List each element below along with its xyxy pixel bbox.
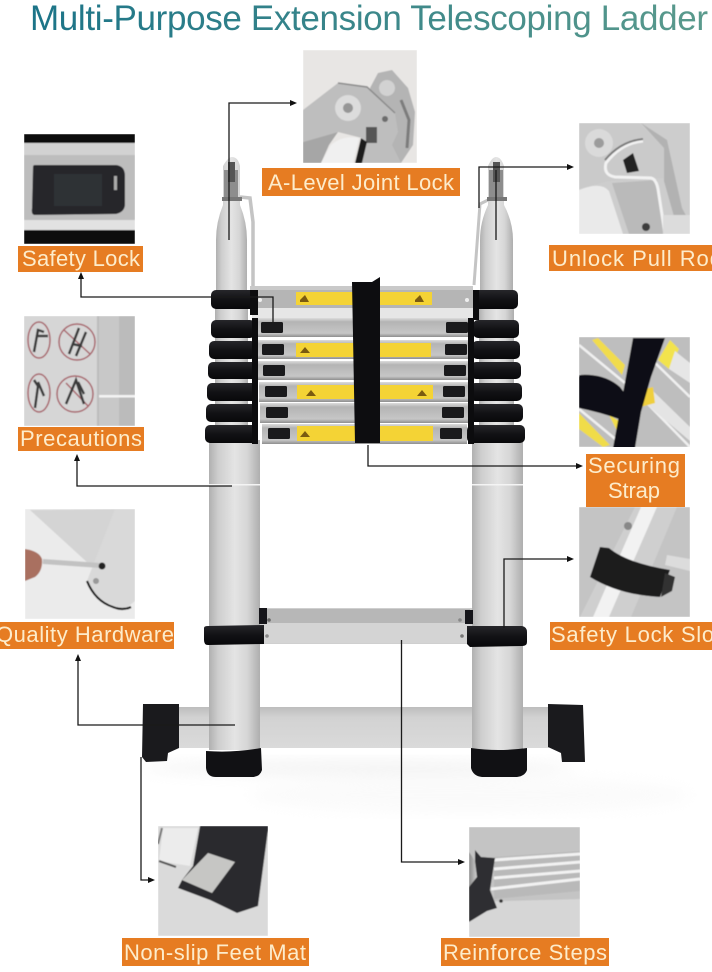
thumbnail: reinforce steps (469, 827, 580, 937)
thumbnail: unlock pull rod (579, 123, 690, 234)
rung 6 (262, 424, 467, 444)
label: Securing Strap: Securing (588, 453, 680, 478)
connector: Non-slip Feet Mat (141, 757, 155, 883)
left upper tube and joint (216, 157, 253, 292)
rung 3 (258, 361, 471, 380)
connector: Unlock Pull Rod (479, 164, 574, 240)
connector: Securing Strap (368, 445, 583, 469)
base bar (179, 707, 549, 748)
label: Securing Strap: Strap (608, 478, 660, 503)
label: Reinforce Steps: Reinforce Steps (443, 940, 607, 965)
connector: Precautions (74, 454, 232, 486)
connector: Reinforce Steps (402, 640, 465, 865)
left foot (142, 704, 179, 762)
thumbnail: quality hardware (25, 509, 135, 619)
securing strap (352, 277, 380, 443)
right foot (548, 704, 585, 762)
floor shadow (145, 760, 690, 813)
lower clamps (204, 625, 527, 647)
tube end caps (206, 748, 527, 777)
ladder (142, 157, 585, 777)
thumbnail: non-slip feet mat (158, 826, 268, 936)
thumbnail: precautions (24, 316, 135, 426)
rung 4 (259, 382, 470, 402)
label: Quality Hardware: Quality Hardware (0, 622, 174, 647)
connector: A-Level Joint Lock (229, 100, 297, 240)
rung 1 (257, 318, 473, 337)
right tubes (472, 305, 523, 750)
label: Precautions: Precautions (20, 426, 142, 451)
top rung with rod (250, 286, 474, 318)
rung 2 (257, 340, 472, 359)
title: Multi-Purpose Extension Telescoping Ladder (30, 0, 708, 38)
thumbnail: securing strap (579, 337, 690, 447)
rung 5 (260, 403, 468, 423)
label: Securing Strap (586, 453, 685, 507)
thumbnail: joint lock (303, 50, 417, 163)
thumbnail: safety lock slot (579, 507, 690, 617)
right clamps (467, 290, 525, 444)
label: Non-slip Feet Mat: Non-slip Feet Mat (124, 940, 306, 965)
label: A-Level Joint Lock: A-Level Joint Lock (268, 170, 455, 195)
left tubes (209, 305, 260, 750)
lower rung (259, 608, 473, 644)
connector: Safety Lock Slot (504, 556, 574, 628)
connector: Quality Hardware (75, 654, 235, 725)
connector: Safety Lock (78, 272, 273, 323)
label: Safety Lock: Safety Lock (22, 246, 141, 271)
right upper tube and joint (474, 157, 513, 292)
left clamps (205, 290, 258, 444)
thumbnail: safety lock (24, 134, 135, 244)
